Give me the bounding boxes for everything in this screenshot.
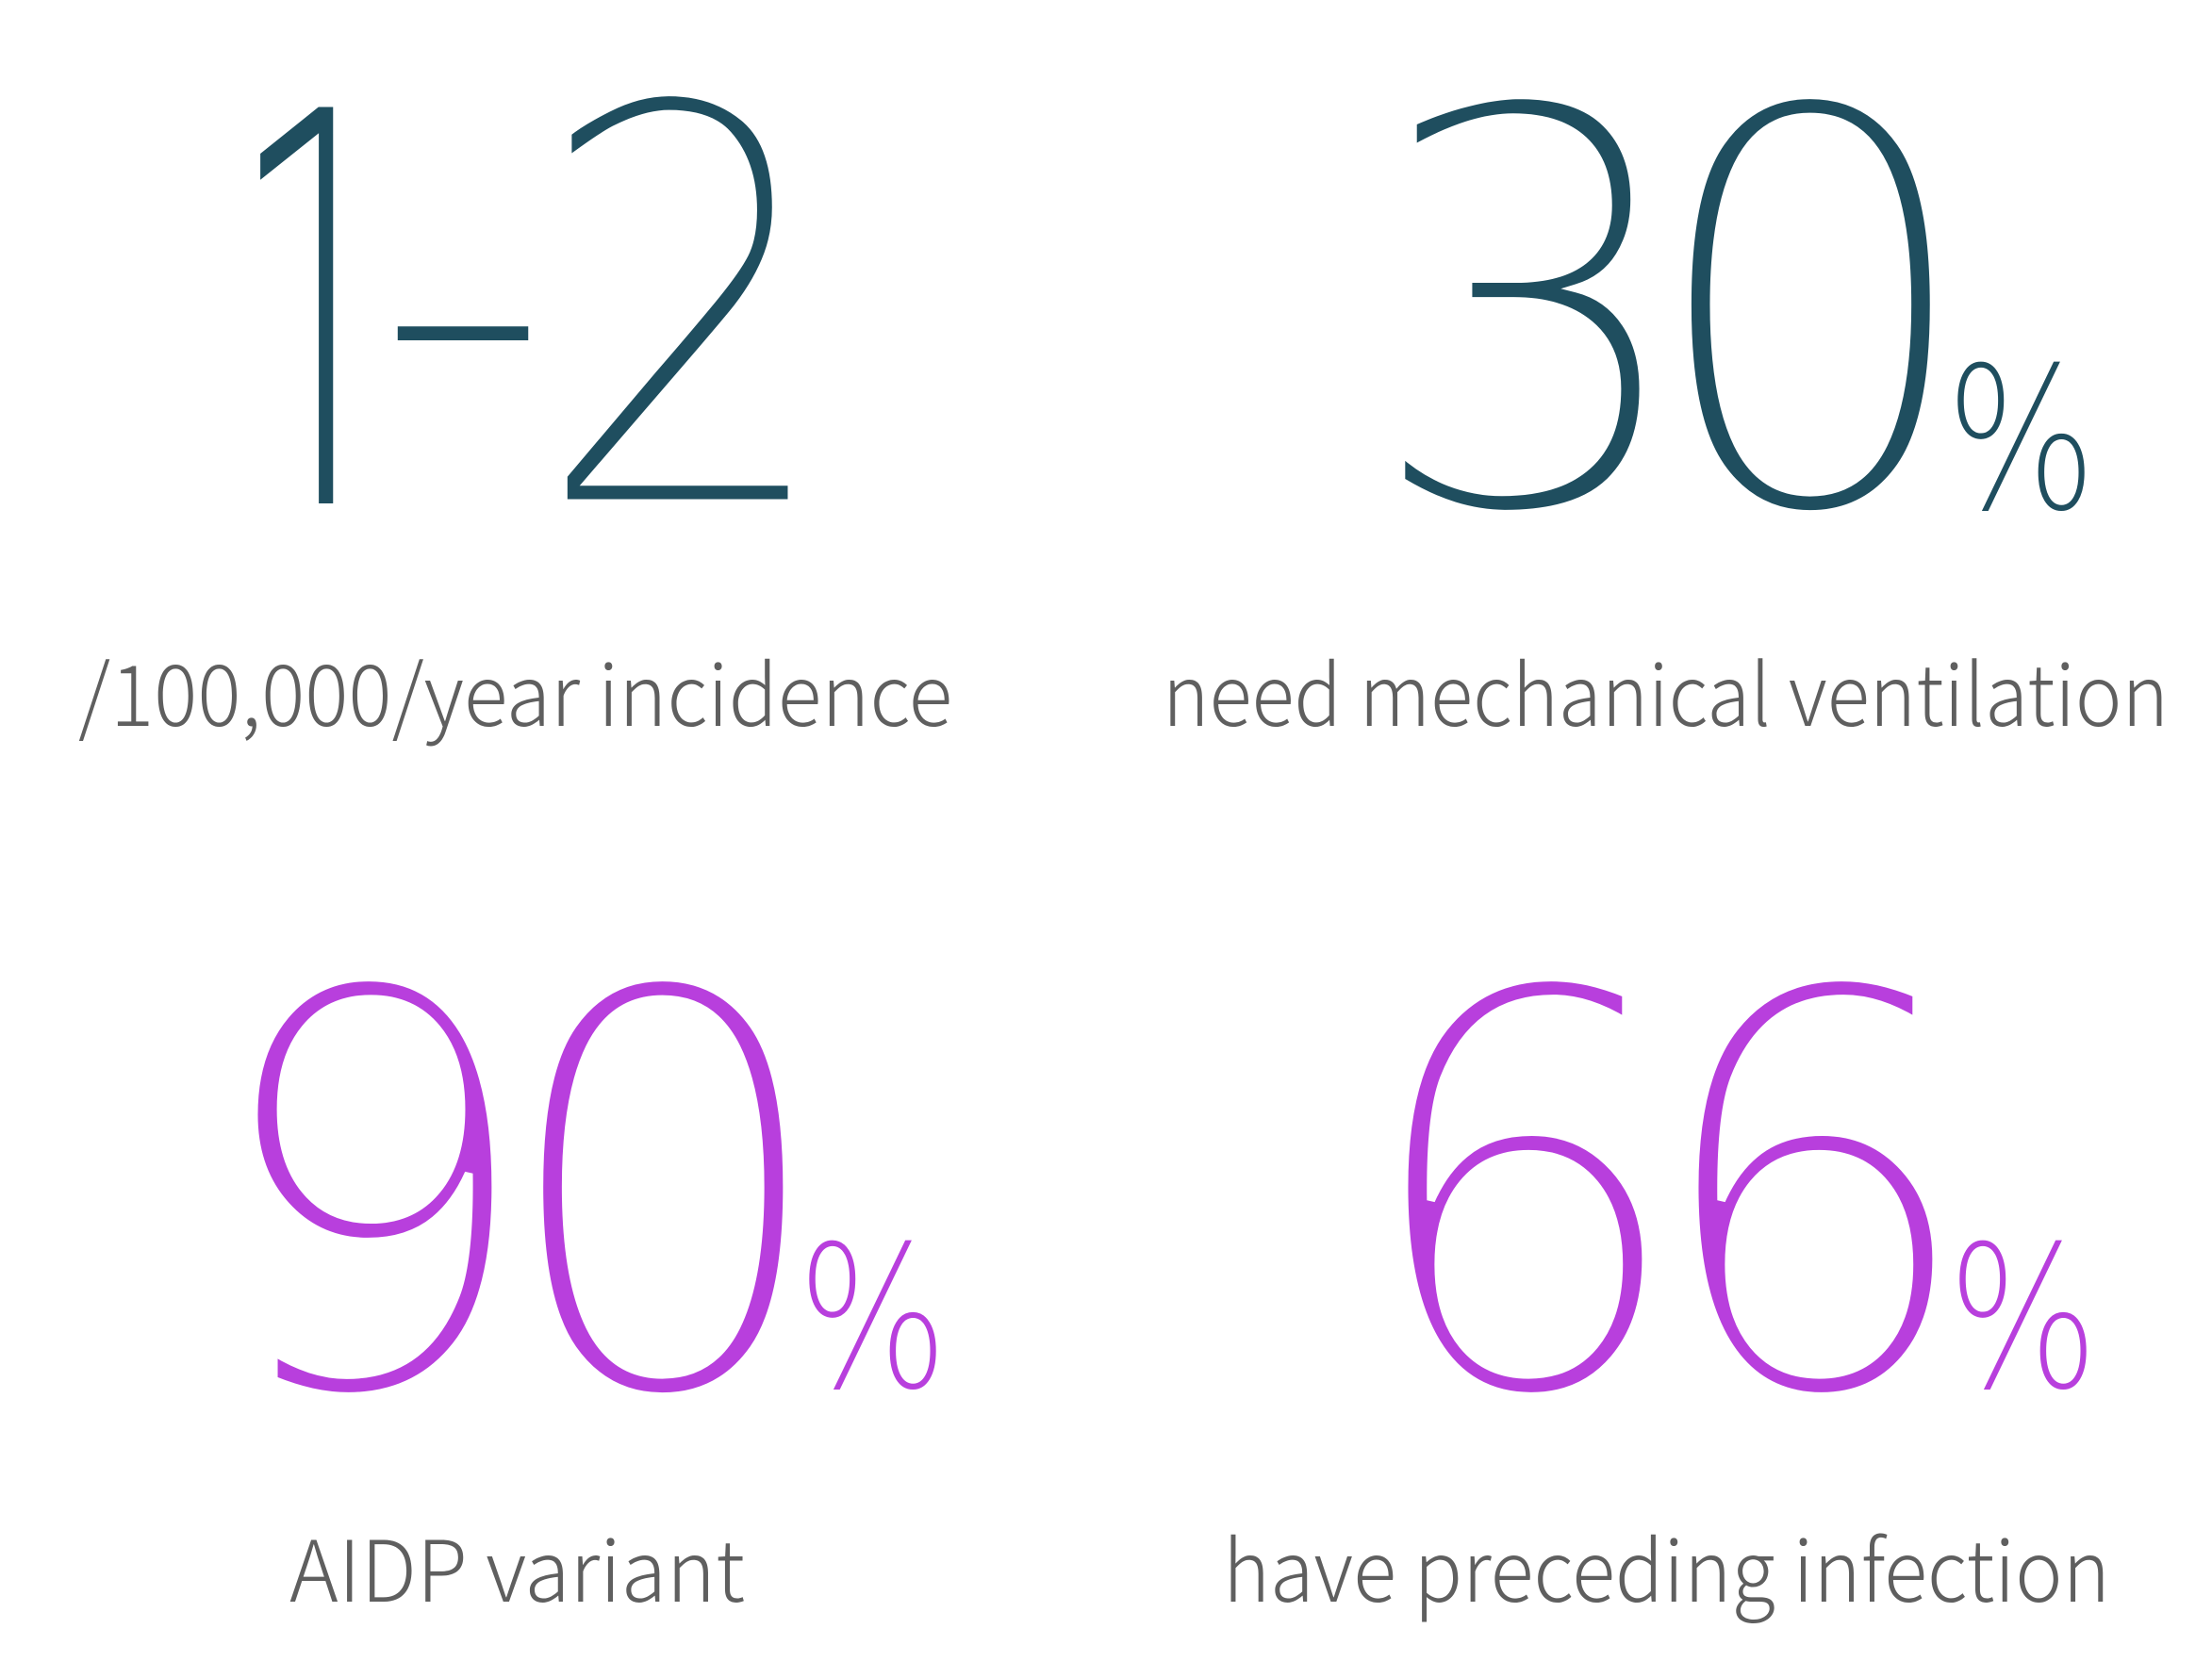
number: 90 percent: 9 [202, 876, 542, 1520]
label: infection: have preceding infection [1223, 1504, 2110, 1626]
stat: infection [1223, 876, 2110, 1626]
number: 1-2: – [382, 106, 544, 512]
number: 1-2: 1 [228, 0, 415, 670]
number: 66 percent [1352, 876, 2099, 1520]
stat: AIDP [202, 874, 949, 1626]
number: 30 percent: 0 [1639, 0, 1985, 637]
label: incidence: /100,000/year incidence [78, 628, 952, 750]
number: 30 percent [1361, 0, 2097, 637]
number: 1-2: 2 [530, 0, 840, 634]
number: 90 percent [202, 874, 949, 1520]
number: 90 percent: 0 [490, 874, 837, 1520]
stat: ventilation [1163, 0, 2169, 750]
number: 30 percent: 3 [1361, 0, 1699, 637]
number: 66 percent: 6 [1642, 876, 1983, 1520]
number: 66 percent: % [1947, 1204, 2099, 1436]
number: 30 percent: % [1945, 325, 2097, 557]
stat: incidence [79, 96, 949, 747]
label: AIDP: AIDP variant [289, 1504, 745, 1626]
number: 90 percent: % [797, 1204, 949, 1436]
number: 1-2 [260, 96, 788, 503]
number: 66 percent: 6 [1352, 876, 1692, 1520]
